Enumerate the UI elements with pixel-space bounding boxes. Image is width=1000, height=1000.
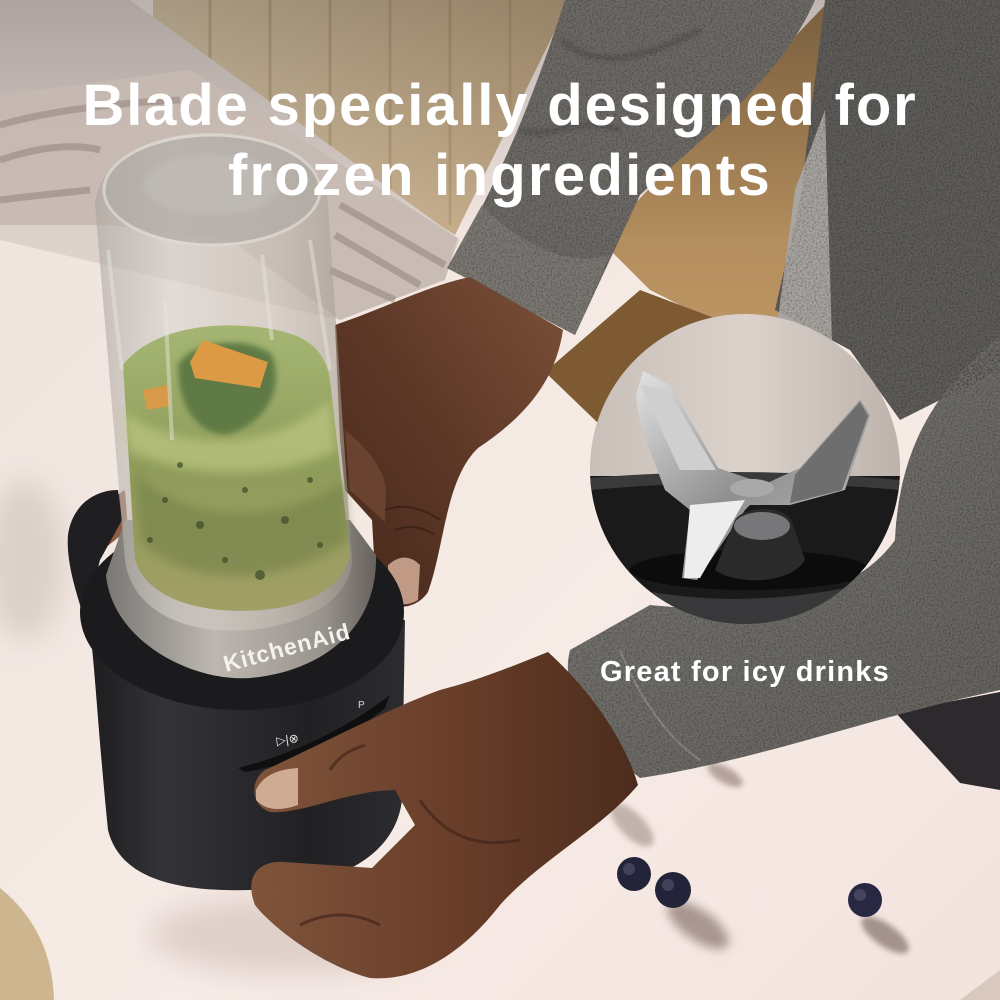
brand name on silver ring: KitchenAid <box>221 618 353 677</box>
green smoothie <box>123 325 350 611</box>
upper hand holding the jar <box>93 277 563 607</box>
glass blender jar <box>95 133 352 631</box>
upper sleeve <box>447 0 815 335</box>
lower sleeve <box>568 335 1000 778</box>
lower hand on the base <box>251 652 638 978</box>
blueberries <box>617 857 882 917</box>
blender base: P <box>358 700 365 711</box>
shirt and sleeve texture <box>447 0 1000 778</box>
shirt torso <box>775 0 1000 420</box>
table shadows <box>0 480 914 975</box>
blender base <box>68 490 405 890</box>
title: Blade specially designed for <box>82 73 918 138</box>
circular blade close-up <box>590 314 900 626</box>
mango pieces <box>190 340 268 388</box>
caption: Great for icy drinks <box>600 656 890 688</box>
striped cloth <box>0 70 458 320</box>
title second line: frozen ingredients <box>228 143 772 208</box>
woven placemat <box>0 888 54 1000</box>
steel blade <box>636 371 870 580</box>
control symbols: ▷|⊗ <box>275 731 300 748</box>
